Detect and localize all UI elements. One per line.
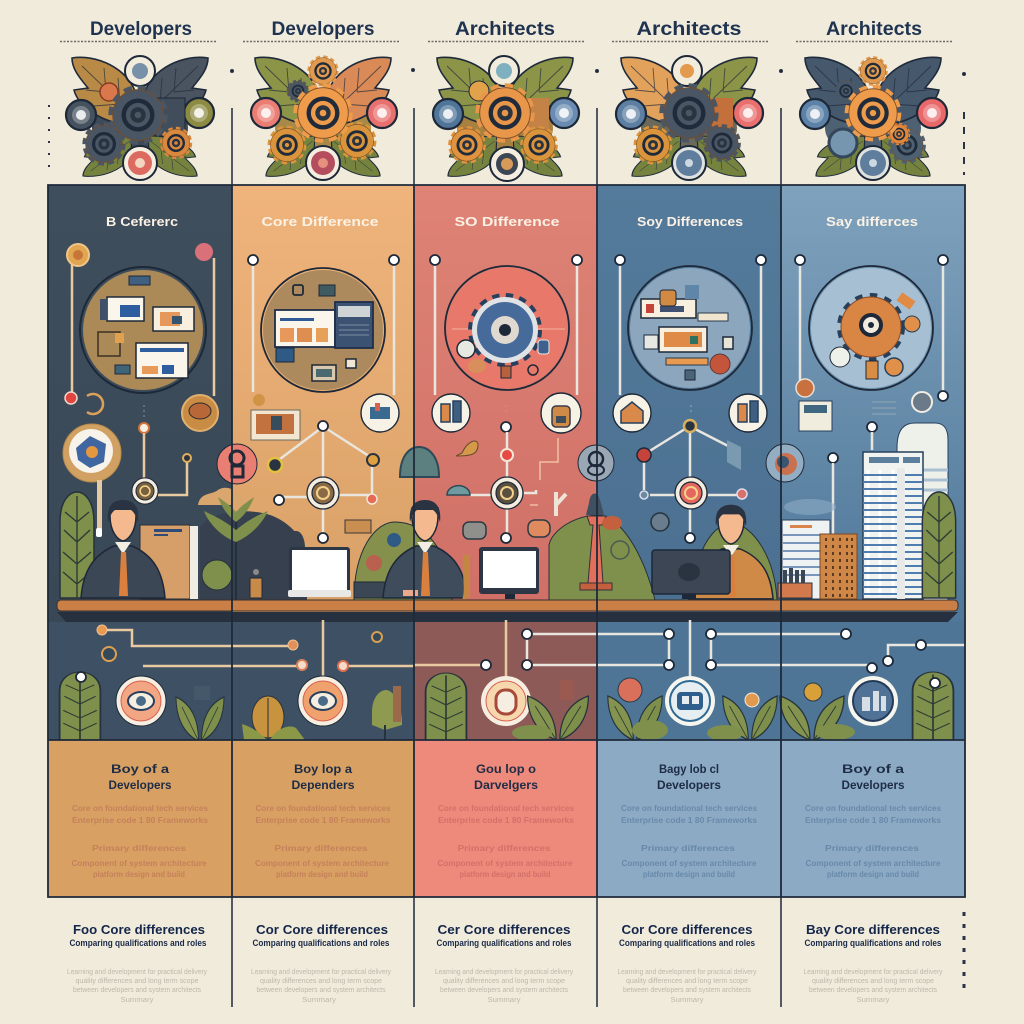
panel subheadings	[106, 214, 918, 229]
text: card 3: platform design and build	[460, 870, 551, 879]
panel subheadings: Say differces	[826, 214, 918, 229]
text: footer column 1: Learning and development for practical delivery	[67, 969, 207, 976]
text: footer column 3: Learning and development for practical delivery	[435, 969, 573, 976]
text: card 4: Bagy lob cl	[659, 762, 719, 776]
scene: desk row	[57, 488, 958, 622]
panel subheadings: Core Difference	[262, 214, 378, 229]
text: footer column 1: Comparing qualifications and roles	[70, 938, 206, 948]
text: card 5	[805, 762, 942, 879]
medal row	[116, 676, 898, 726]
medal 4	[665, 676, 715, 726]
text: footer column 1	[67, 922, 207, 1004]
text: card 5: Enterprise code 1 80 Frameworks	[805, 816, 942, 825]
text: card 4: Component of system architecture	[622, 859, 757, 868]
text: card 4: Primary differences	[641, 844, 736, 853]
text: card 5: Developers	[842, 778, 905, 792]
big circle with windows	[83, 270, 203, 390]
text: card 3: Enterprise code 1 80 Frameworks	[438, 816, 575, 825]
text: footer column 4: Comparing qualifications and roles	[619, 938, 755, 948]
gold leaf	[242, 696, 305, 740]
icon: lock badge	[541, 393, 581, 433]
text: card 3: Component of system architecture	[438, 859, 573, 868]
text: footer column 3: Comparing qualifications and roles	[436, 938, 572, 948]
text: footer column 5: Summary	[856, 997, 890, 1004]
text: footer column 3: Cer Core differences	[438, 922, 570, 937]
panel: column backgrounds	[48, 185, 965, 740]
text: card 4: Developers	[657, 778, 721, 792]
big circle with windows	[630, 268, 750, 388]
text: card 2: Enterprise code 1 80 Frameworks	[256, 816, 391, 825]
text: card 4: Core on foundational tech services	[621, 804, 758, 813]
text: footer column 3	[435, 922, 573, 1004]
icon: document chip	[361, 394, 399, 432]
text: footer column 1: quality differences and long term scope	[76, 978, 199, 985]
text: footer column 4: Cor Core differences	[622, 922, 752, 937]
icon: pen box	[778, 568, 812, 598]
text: footer column 2: Learning and development for practical delivery	[251, 969, 391, 976]
icon: tall building	[863, 452, 923, 599]
text: footer column 2: quality differences and long term scope	[260, 978, 382, 985]
text: footer column 4: between developers and system architects	[623, 987, 751, 994]
text: footer column 1: Summary	[120, 997, 154, 1004]
text: card 1: Core on foundational tech services	[72, 804, 209, 813]
headings row: Architects	[826, 19, 922, 40]
text: footer column 4: Learning and development for practical delivery	[618, 969, 757, 976]
text: footer column 1: Foo Core differences	[73, 922, 205, 937]
laptop 3	[652, 550, 730, 599]
text: card 1: Developers	[108, 778, 172, 792]
text: card 5: Core on foundational tech services	[805, 804, 942, 813]
cloud	[198, 488, 247, 505]
text: card 5: Component of system architecture	[806, 859, 941, 868]
icon: white tower	[897, 423, 948, 600]
text: card 2: platform design and build	[276, 870, 368, 879]
icon: half dome	[400, 447, 439, 477]
text: card 3	[438, 762, 575, 879]
text: card 3: Darvelgers	[474, 778, 538, 792]
icon: low white building	[782, 520, 830, 599]
text: card 1	[72, 762, 209, 879]
text: footer column 2: Summary	[302, 997, 337, 1004]
icon: bouquet developers 1	[66, 56, 214, 180]
text: footer column 5: Bay Core differences	[806, 922, 940, 937]
small tree	[372, 686, 402, 740]
text: footer column 2: Cor Core differences	[256, 922, 388, 937]
text: card 2: Core on foundational tech services	[256, 804, 391, 813]
headings row: Architects	[636, 19, 742, 40]
text: footer column 2: Comparing qualifications and roles	[252, 938, 390, 948]
text: footer column 5: between developers and system architects	[809, 987, 937, 994]
text: footer column 3: Summary	[488, 997, 521, 1004]
big circle with gear	[811, 268, 931, 388]
icon: portrait badge	[766, 444, 804, 482]
headings row: Architects	[455, 19, 555, 40]
medal 5	[848, 676, 898, 726]
text: card 3: Primary differences	[458, 844, 551, 853]
text: card 1: Component of system architecture	[72, 859, 207, 868]
text: card 2: Dependers	[292, 778, 355, 792]
text: card 1: Enterprise code 1 80 Frameworks	[72, 816, 209, 825]
green hill right	[549, 515, 655, 600]
text: footer column 1: between developers and system architects	[73, 987, 201, 994]
text: card 3: Gou lop o	[476, 762, 536, 776]
icon: bouquet architects 3	[800, 57, 947, 180]
icon: bouquet developers 2	[251, 57, 397, 180]
green arch 1	[354, 522, 452, 600]
text: card 5: platform design and build	[827, 870, 919, 879]
green arch 3	[693, 522, 777, 600]
diagram: column 1	[63, 243, 218, 537]
text: footer column 5: quality differences and long term scope	[812, 978, 934, 985]
panel subheadings: SO Difference	[454, 214, 560, 229]
laptop 1	[288, 547, 351, 597]
icon: bouquet architects 2	[616, 56, 763, 180]
diagram: column 3	[400, 255, 614, 543]
person 2	[383, 500, 467, 598]
medal 3	[481, 676, 531, 726]
icon: gold medallion	[63, 424, 121, 482]
text: footer column 4: Summary	[670, 997, 704, 1004]
text: footer column 2: between developers and system architects	[256, 987, 386, 994]
person 1	[81, 500, 165, 598]
text: footer column 5	[804, 922, 943, 1004]
icon: red badge	[217, 444, 257, 484]
panel: cards	[48, 185, 965, 897]
icon: grey badge	[578, 445, 614, 481]
icon: orange building	[820, 534, 857, 599]
text: footer column 2	[251, 922, 391, 1004]
headings row	[60, 19, 952, 42]
icon: bouquet architects 1	[433, 56, 579, 181]
text: card 2: Primary differences	[274, 844, 368, 853]
text: card 1: Primary differences	[92, 844, 187, 853]
diagram: column 5	[766, 255, 956, 600]
text: footer column 5: Comparing qualifications and roles	[804, 938, 942, 948]
text: card 2: Component of system architecture	[255, 859, 390, 868]
text: card 5: Boy of a	[842, 762, 904, 776]
plant behind laptop	[200, 497, 307, 600]
text: card 4	[621, 762, 758, 879]
plant: tall left	[60, 492, 94, 598]
headings row: Developers	[90, 19, 192, 40]
text: card 5: Primary differences	[825, 844, 920, 853]
text: card 1: Boy of a	[111, 762, 169, 776]
text: card 3: Core on foundational tech services	[438, 804, 575, 813]
monitor 2	[479, 547, 539, 599]
lower connectors	[97, 620, 965, 676]
text: card 2	[255, 762, 391, 879]
text: card 4: platform design and build	[643, 870, 735, 879]
text: card 1: platform design and build	[93, 870, 185, 879]
plants row	[60, 672, 953, 741]
text: footer column 3: quality differences and long term scope	[443, 978, 565, 985]
panel subheadings: B Cefererc	[106, 214, 178, 229]
panel subheadings: Soy Differences	[637, 214, 743, 229]
text: card 2: Boy lop a	[294, 762, 352, 776]
text: footer column 4	[618, 922, 757, 1004]
text: footer column 3: between developers and system architects	[440, 987, 568, 994]
person 3	[689, 505, 773, 599]
text: card 4: Enterprise code 1 80 Frameworks	[621, 816, 758, 825]
headings row: Developers	[272, 19, 374, 40]
big circle with windows	[263, 270, 383, 390]
diagram: column 2	[217, 255, 399, 543]
text: footer column 4: quality differences and long term scope	[626, 978, 748, 985]
diagram: column 4	[613, 255, 767, 543]
desk	[57, 600, 958, 622]
text: footer column 5: Learning and development for practical delivery	[804, 969, 943, 976]
big circle with gear	[447, 268, 567, 388]
red lamp	[580, 494, 612, 590]
icon: box badge	[613, 394, 651, 432]
